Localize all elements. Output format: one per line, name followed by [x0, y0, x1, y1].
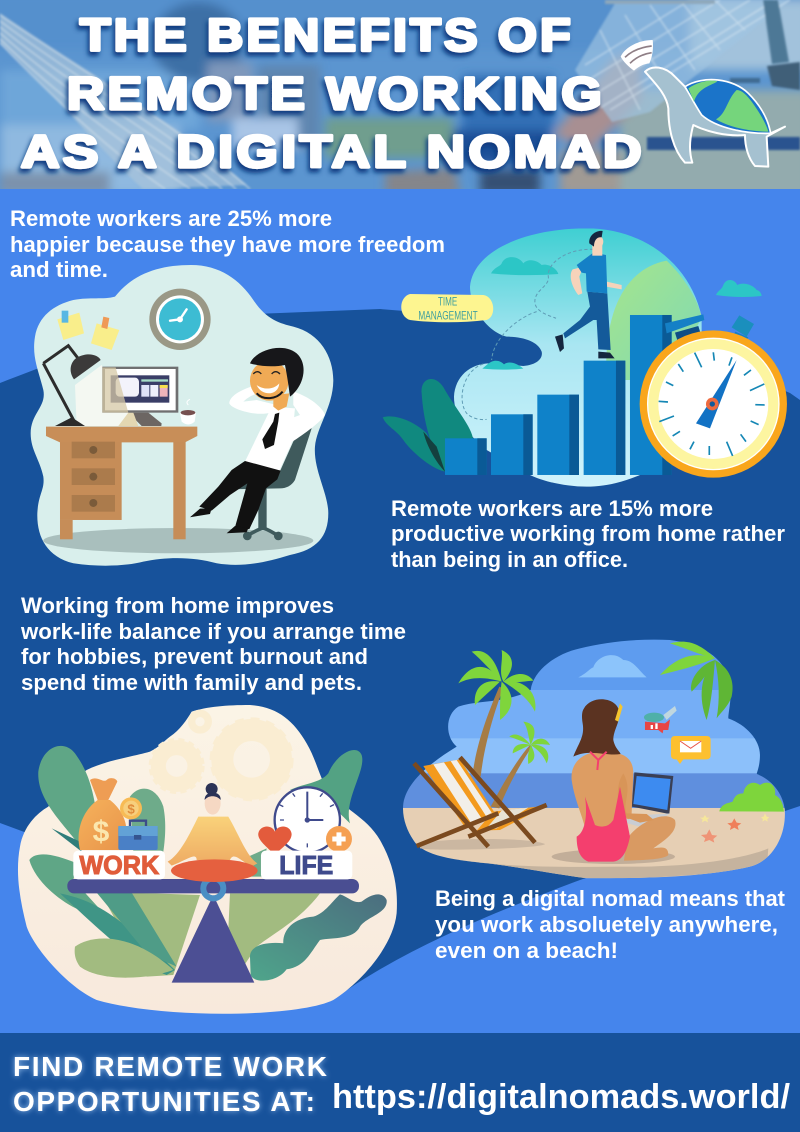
work box: WORK: [79, 850, 160, 880]
icon: money bag: $: [93, 816, 110, 849]
text block: digital nomad beach: you work absoluetely anywhere,: [435, 912, 778, 937]
icon: clock: [275, 787, 340, 853]
icon: briefcase: [118, 821, 158, 850]
dark wavy leaf: [250, 894, 387, 981]
office chair: [232, 425, 312, 540]
label: time management: TIME: [438, 294, 457, 308]
floor shadow: [43, 528, 313, 553]
footer call to action: [13, 1051, 327, 1117]
text block: work-life balance: [20, 593, 406, 695]
life box: [261, 850, 352, 880]
text block: 25% happier: Remote workers are 25% more: [10, 206, 332, 231]
coffee cup: [180, 399, 196, 424]
relaxed smiling man: [190, 348, 325, 533]
icon: stopwatch: [640, 314, 787, 478]
text block: 25% happier: [10, 206, 445, 282]
text block: 25% happier: happier because they have more freedom: [10, 232, 445, 257]
dashed route: [462, 249, 593, 420]
icon: mini turtle chart bubble: [644, 706, 677, 733]
dark blue wave band: [0, 309, 800, 1000]
icon: wall clock: [149, 289, 211, 350]
walking man: [555, 231, 622, 358]
light cone: [75, 365, 138, 426]
icon: deck chair: [414, 757, 547, 847]
beam and fulcrum: [67, 878, 359, 983]
leaves: [29, 746, 362, 978]
icon: coin: $: [127, 801, 135, 816]
text block: work-life balance: for hobbies, prevent burnout and: [21, 644, 368, 669]
computer monitor: [102, 367, 178, 426]
title: REMOTE WORKING: [67, 68, 605, 119]
desk lamp: [43, 346, 101, 426]
icon: turtle with globe shell and wifi signal: [621, 40, 785, 167]
icon: bush: [719, 783, 784, 812]
icon: coin: [120, 797, 142, 819]
title: AS A DIGITAL NOMAD: [21, 126, 645, 177]
panel: time management illustration: [383, 228, 787, 487]
title: [21, 10, 645, 177]
bar chart steps: [445, 315, 672, 475]
text block: digital nomad beach: even on a beach!: [435, 938, 618, 963]
desk: [46, 427, 197, 539]
text block: 15% more productive: Remote workers are 15% more: [391, 496, 713, 521]
footer call to action: FIND REMOTE WORK: [13, 1051, 327, 1082]
text block: 15% more productive: than being in an office.: [391, 547, 628, 572]
panel: work-life balance illustration: [18, 705, 397, 1014]
panel: beach digital nomad illustration: [400, 637, 800, 883]
text block: work-life balance: work-life balance if you arrange time: [20, 619, 406, 644]
label: time management: [401, 294, 493, 322]
header photo: remote worker in a hammock by the sea: [0, 0, 800, 200]
life box: LIFE: [279, 850, 333, 880]
title: THE BENEFITS OF: [80, 10, 574, 60]
footer url: https://digitalnomads.world/: [332, 1078, 791, 1116]
icon: heart: [258, 826, 292, 855]
icon: plus badge: [326, 826, 352, 852]
footer band: [0, 1033, 800, 1132]
woman with laptop: [552, 699, 675, 864]
footer call to action: OPPORTUNITIES AT:: [13, 1086, 315, 1117]
text block: digital nomad beach: [435, 886, 786, 963]
label: time management: MANAGEMENT: [418, 308, 478, 322]
meditating woman: [168, 783, 258, 882]
text block: 25% happier: and time.: [10, 257, 108, 282]
chair and woman shadows: [420, 839, 545, 850]
gears: [151, 713, 291, 799]
panel: happier remote worker illustration: [31, 265, 333, 566]
icon: palm trees: [458, 642, 733, 808]
icon: email bubble: [671, 736, 711, 764]
text block: work-life balance: spend time with family and pets.: [21, 670, 362, 695]
starfish: [700, 813, 769, 843]
green hill: [606, 261, 702, 380]
clouds: [482, 257, 762, 370]
icon: leaves: [383, 379, 473, 472]
icon: money bag: [79, 778, 126, 850]
cloud: [578, 655, 647, 677]
text block: 15% more productive: productive working from home rather: [391, 521, 785, 546]
text block: work-life balance: Working from home improves: [21, 593, 334, 618]
text block: 15% more productive: [391, 496, 785, 572]
text block: digital nomad beach: Being a digital nomad means that: [435, 886, 786, 911]
sticky notes: [57, 311, 119, 350]
